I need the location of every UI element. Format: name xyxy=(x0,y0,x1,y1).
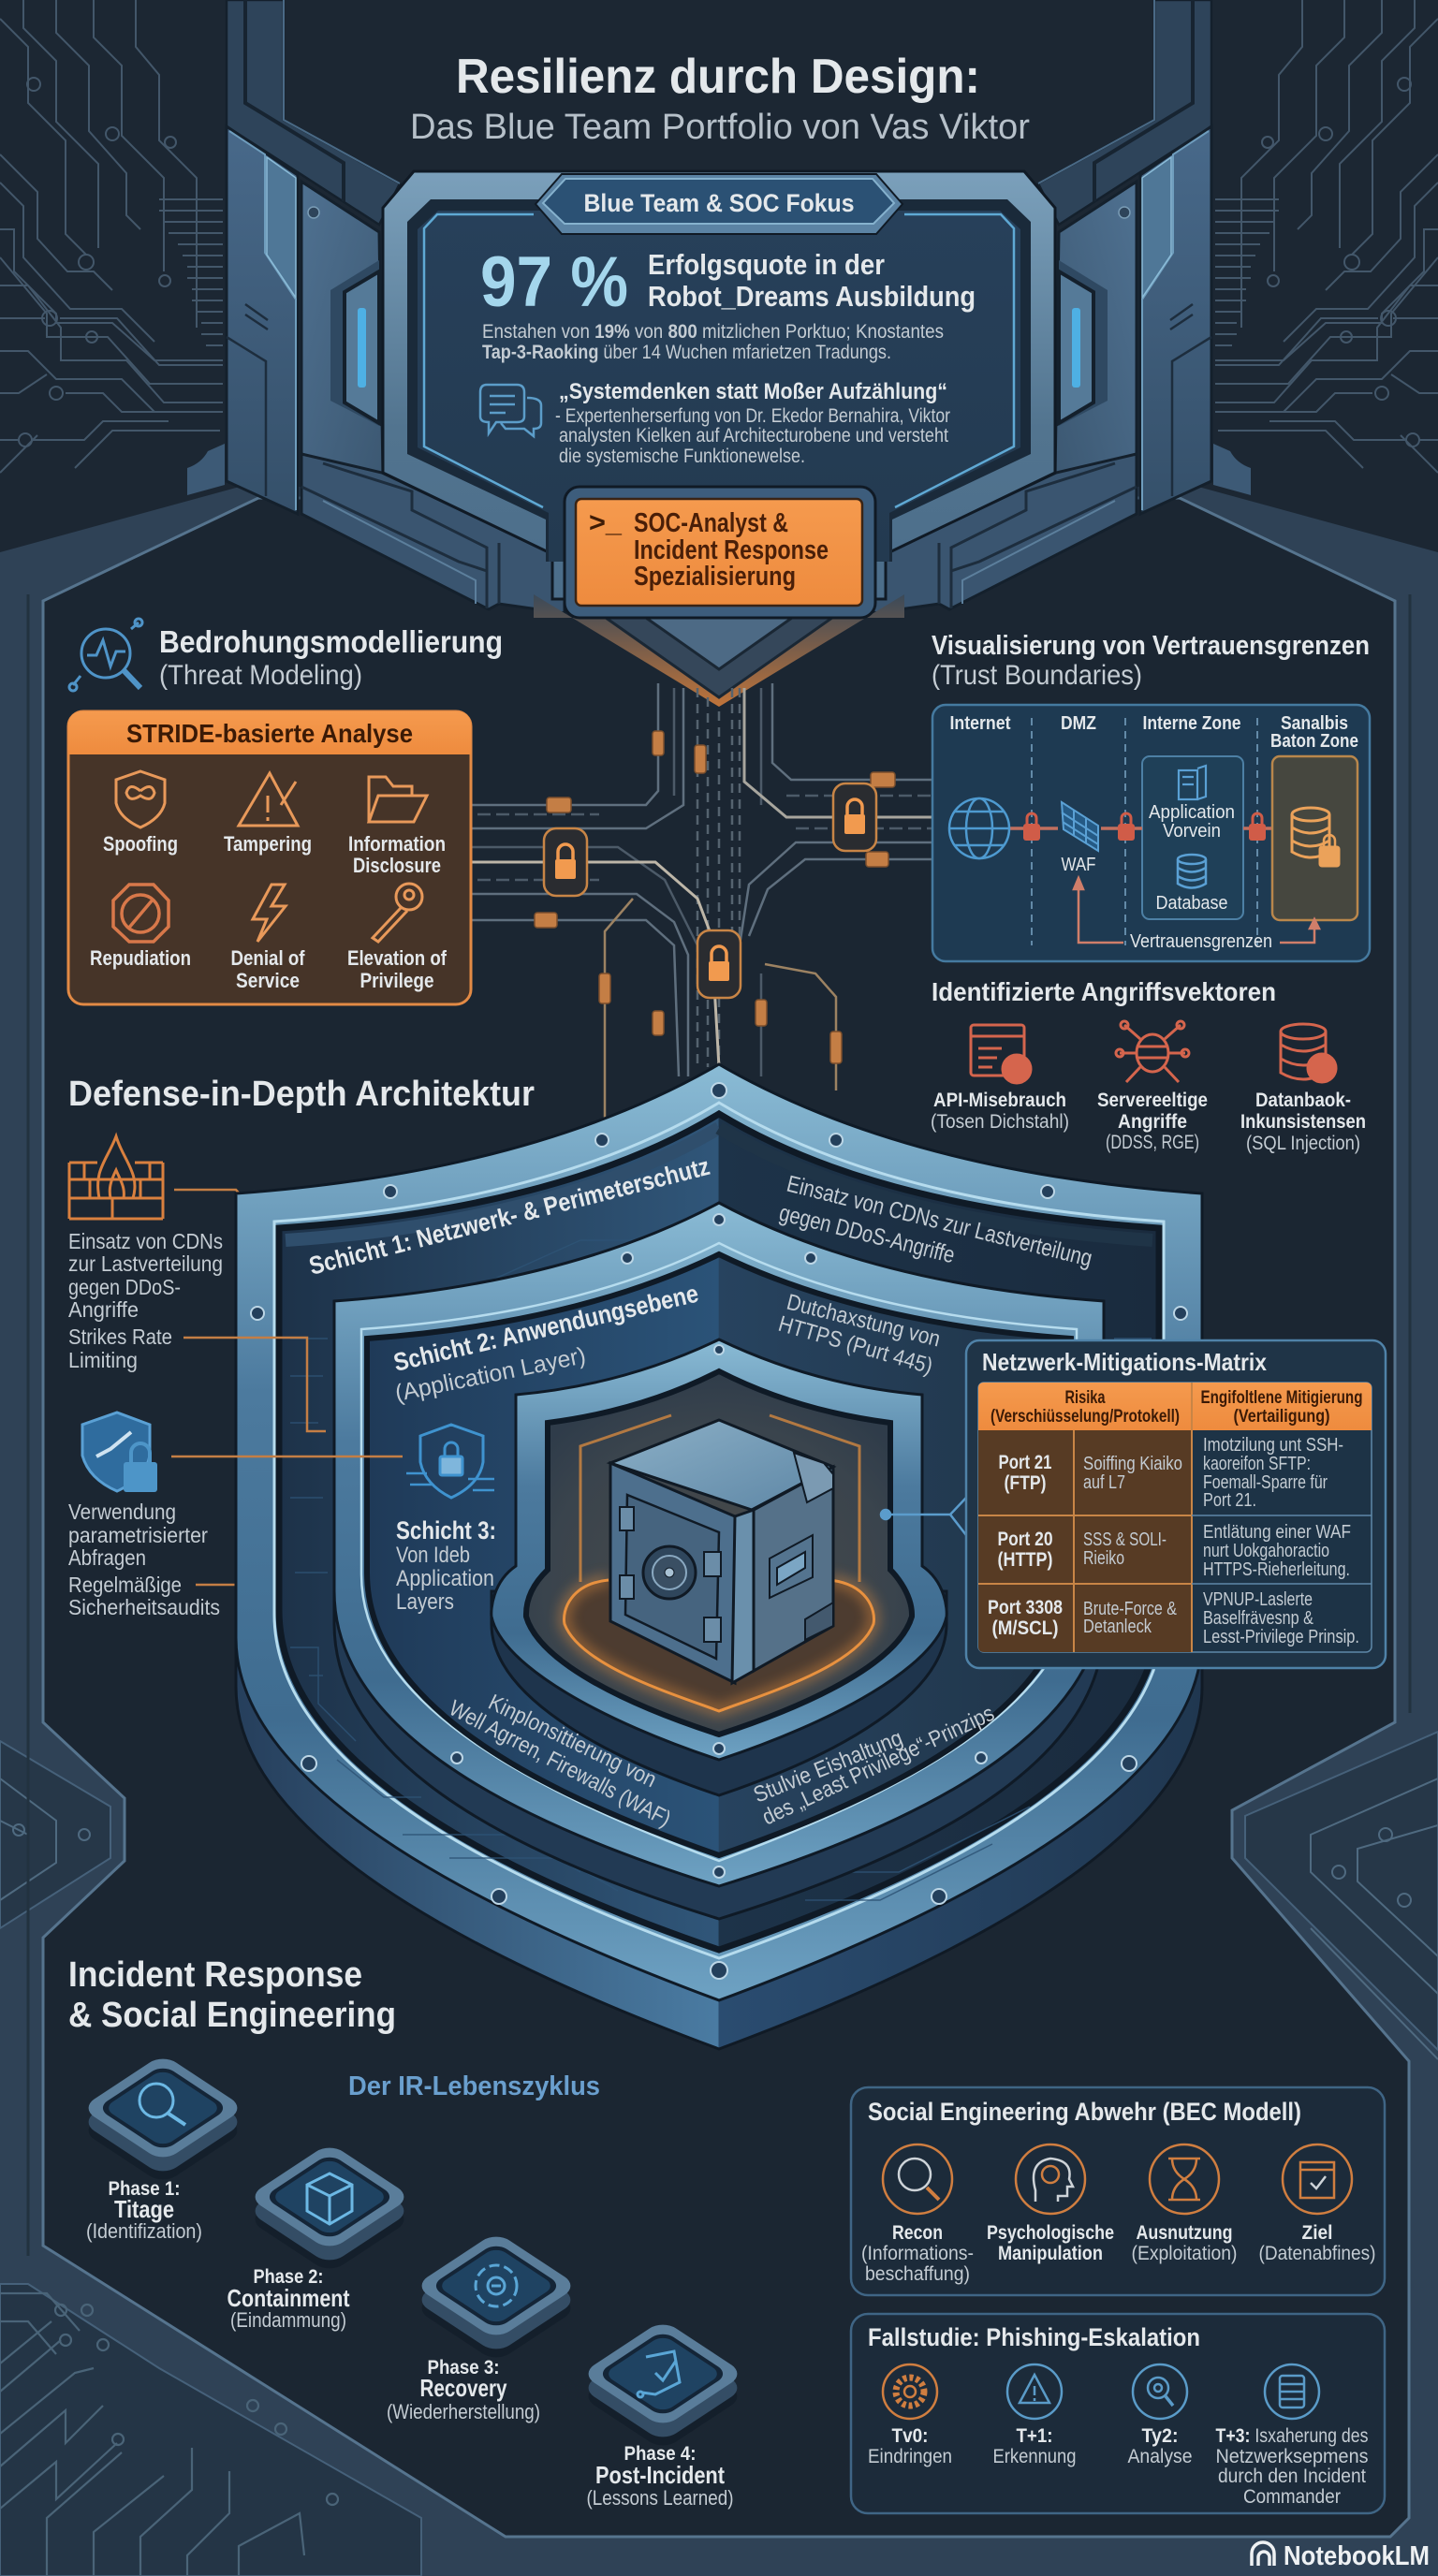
table: VPNUP-Laslerte xyxy=(1203,1589,1313,1610)
icon: gear xyxy=(476,2265,517,2306)
case study labels: Commander xyxy=(1243,2486,1341,2508)
STRIDE labels: Privilege xyxy=(360,969,434,992)
heading: incident response: Incident Response xyxy=(68,1955,362,1995)
case study labels: Erkennung xyxy=(992,2446,1077,2467)
case study title: Fallstudie: Phishing-Eskalation xyxy=(868,2323,1200,2351)
lower left description: Kinplonsittierung von xyxy=(484,1690,660,1793)
icon: psychological manipulation xyxy=(1016,2144,1085,2214)
rate limiting leader xyxy=(183,1338,326,1431)
shield leader xyxy=(171,1456,403,1457)
icon: recon xyxy=(883,2144,952,2214)
layer 1 rim highlight xyxy=(274,1103,1164,1958)
attack vector labels: Datanbaok- xyxy=(1255,1090,1351,1111)
attack vector labels: Inkunsistensen xyxy=(1240,1111,1366,1133)
lower right description: des „Least Privilege“-Prinzips xyxy=(758,1701,998,1830)
title: Resilienz durch Design: xyxy=(456,50,980,104)
icon: exploitation xyxy=(1150,2144,1219,2214)
STRIDE labels: Tampering xyxy=(224,832,312,856)
firewall text: Strikes Rate xyxy=(68,1325,172,1349)
phase 4 label xyxy=(586,2443,734,2510)
label: database: Database xyxy=(1155,893,1228,914)
icon: lock on the left trace xyxy=(544,828,587,896)
stat description: Robot_Dreams Ausbildung xyxy=(648,280,976,313)
phase 1 label xyxy=(86,2178,202,2243)
panel: STRIDE analysis xyxy=(68,711,471,1004)
icon: denial of service xyxy=(253,885,286,942)
section: threat modeling heading: Bedrohungsmodellierung xyxy=(159,624,503,659)
firewall text xyxy=(68,1229,223,1372)
expert quote xyxy=(555,379,950,467)
STRIDE labels: Spoofing xyxy=(103,832,178,856)
firewall text: zur Lastverteilung xyxy=(68,1251,223,1276)
layer 1 rim xyxy=(236,1064,1202,2000)
social engineering title: Social Engineering Abwehr (BEC Modell) xyxy=(868,2098,1301,2126)
firewall leader xyxy=(174,1190,257,1213)
phase 4 label: Post-Incident xyxy=(595,2461,725,2489)
table: SSS & SOLI- xyxy=(1083,1530,1167,1550)
phase 4 tile xyxy=(580,2320,745,2510)
layer 3 vault interior xyxy=(526,1371,912,1734)
heading: IR lifecycle: Der IR-Lebenszyklus xyxy=(348,2071,600,2101)
phase 2 label: Phase 2: xyxy=(253,2266,324,2288)
section: threat modeling heading: (Threat Modeling) xyxy=(159,660,362,691)
icon: document xyxy=(1265,2364,1319,2419)
panel: trust boundaries diagram xyxy=(932,705,1370,961)
layer 1 description: Einsatz von CDNs zur Lastverteilung xyxy=(785,1171,1094,1272)
body text xyxy=(482,321,944,363)
icon: locked database xyxy=(1292,808,1339,866)
layer 2 heading: (Application Layer) xyxy=(393,1342,588,1407)
section: threat modeling heading xyxy=(69,619,503,691)
phase 1 label: Titage xyxy=(114,2195,174,2223)
lower left description: Well Agrren, Firewalls (WAF) xyxy=(445,1695,675,1832)
phase 2 label xyxy=(227,2266,350,2332)
expert quote: die systemische Funktionewelse. xyxy=(559,446,805,467)
attack vector labels: (SQL Injection) xyxy=(1246,1133,1360,1154)
title xyxy=(410,50,1030,147)
table: Port 21. xyxy=(1203,1490,1256,1511)
table: Port 20 xyxy=(998,1529,1052,1550)
column labels: DMZ xyxy=(1061,713,1096,734)
badge: Blue Team & SOC Fokus xyxy=(536,174,902,234)
layer 1 heading: Schicht 1: Netzwerk- & Perimeterschutz xyxy=(306,1152,712,1281)
layer 3 text: Schicht 3: xyxy=(396,1516,496,1544)
table: (M/SCL) xyxy=(992,1617,1058,1639)
icon: checklist xyxy=(638,2351,680,2397)
STRIDE labels: Disclosure xyxy=(353,854,441,877)
panel: social engineering xyxy=(851,2087,1385,2295)
STRIDE labels: Information xyxy=(348,832,446,856)
social engineering labels: Psychologische xyxy=(987,2222,1114,2244)
social engineering labels xyxy=(861,2222,1376,2285)
layer 3 text: Layers xyxy=(396,1589,454,1615)
phase 3 label xyxy=(387,2357,540,2423)
rivets xyxy=(251,1083,1187,1979)
callout: SOC analyst specialization xyxy=(565,487,875,618)
layer 2 depth xyxy=(334,1339,1104,1919)
audits leader xyxy=(196,1584,279,1586)
label: application: Vorvein xyxy=(1163,821,1221,842)
icon: layer 3 shield xyxy=(406,1425,494,1498)
social engineering labels: beschaffung) xyxy=(865,2263,970,2285)
layer 2 rim xyxy=(334,1203,1104,1886)
label: WAF: WAF xyxy=(1062,855,1095,875)
icon: lock on the lower trace xyxy=(697,930,741,998)
label: application: Application xyxy=(1149,802,1235,823)
table: (Vertailigung) xyxy=(1234,1407,1329,1427)
social engineering labels: (Datenabfines) xyxy=(1258,2243,1376,2264)
social engineering labels: Ziel xyxy=(1301,2222,1333,2244)
section: trust boundaries heading: (Trust Boundaries) xyxy=(932,660,1142,691)
column labels: Internet xyxy=(949,713,1011,734)
phase 4 label: (Lessons Learned) xyxy=(586,2486,734,2510)
expert quote: „Systemdenken statt Moßer Aufzählung“ xyxy=(559,379,947,404)
heading: incident response: & Social Engineering xyxy=(68,1996,396,2035)
layer 3 rim xyxy=(492,1339,946,1760)
layer 2 description xyxy=(775,1290,943,1380)
case study labels: Eindringen xyxy=(868,2446,952,2467)
top structural plates xyxy=(227,0,1211,613)
layer 3 depth xyxy=(492,1591,946,1795)
shield text xyxy=(68,1500,220,1619)
icon: API abuse xyxy=(971,1025,1031,1083)
firewall text: Einsatz von CDNs xyxy=(68,1229,223,1253)
attack vector labels: API-Misebrauch xyxy=(933,1090,1066,1111)
layer 2 rim highlight xyxy=(361,1243,1077,1861)
chevron below the panel xyxy=(534,594,904,707)
firewall text: Limiting xyxy=(68,1348,138,1372)
internal zone box xyxy=(1142,756,1243,919)
icon: lock on the right trace xyxy=(833,783,876,851)
panel: phishing case study xyxy=(851,2314,1385,2513)
table: kaoreifon SFTP: xyxy=(1203,1454,1311,1474)
icon: box xyxy=(307,2174,352,2224)
callout: SOC analyst specialization: >_ xyxy=(589,507,622,538)
STRIDE labels: Service xyxy=(236,969,300,992)
icon: speech bubbles xyxy=(480,385,541,436)
table: Engifoltlene Mitigierung xyxy=(1200,1388,1363,1408)
table xyxy=(978,1383,1372,1652)
attack vector labels: (DDSS, RGE) xyxy=(1106,1132,1199,1153)
social engineering labels: Recon xyxy=(892,2222,943,2244)
phase 3 label: Recovery xyxy=(419,2374,507,2402)
case study labels: T+1: xyxy=(1017,2425,1052,2447)
social engineering labels: (Informations- xyxy=(861,2243,974,2264)
body text: Tap-3-Raoking über 14 Wuchen mfarietzen Tradungs. xyxy=(482,342,891,363)
case study labels xyxy=(868,2425,1369,2508)
table: HTTPS-Rieherleitung. xyxy=(1203,1559,1350,1580)
icon: magnifier with pulse xyxy=(69,619,142,691)
layer 2 heading xyxy=(391,1280,701,1407)
layer 2 floor xyxy=(367,1254,1071,1855)
attack vector labels: Angriffe xyxy=(1118,1111,1187,1133)
icon: information disclosure xyxy=(369,777,427,822)
shield text: Sicherheitsaudits xyxy=(68,1595,220,1619)
icon: magnifier xyxy=(139,2084,185,2125)
icon: alert xyxy=(1007,2364,1062,2419)
phase 3 label: (Wiederherstellung) xyxy=(387,2400,540,2423)
STRIDE labels: Repudiation xyxy=(90,946,191,970)
stat description: Erfolgsquote in der xyxy=(648,248,885,281)
lower right description: Stulvie Eishaltung xyxy=(750,1725,906,1808)
attack vector labels xyxy=(931,1090,1366,1154)
callout: SOC analyst specialization: Spezialisierung xyxy=(634,562,796,592)
heading: defense in depth: Defense-in-Depth Architektur xyxy=(68,1075,535,1114)
phase 2 label: (Eindammung) xyxy=(230,2308,346,2332)
floor circuit texture xyxy=(290,1240,1152,1900)
shield text: Regelmäßige xyxy=(68,1573,182,1597)
orange glow ring xyxy=(565,1415,873,1711)
phase 3 tile xyxy=(387,2232,579,2423)
trace pads xyxy=(535,731,895,1063)
icon: spoofing xyxy=(116,771,165,827)
icon: analysis xyxy=(1133,2364,1187,2419)
layer 1 description: gegen DDoS-Angriffe xyxy=(777,1200,958,1268)
panel: Blue Team and SOC focus xyxy=(383,171,1055,618)
table: (Verschiüsselung/Protokell) xyxy=(990,1407,1180,1427)
column labels: Sanalbis xyxy=(1281,713,1348,734)
label: Vertrauensgrenzen: Vertrauensgrenzen xyxy=(1130,931,1272,952)
icon: database inconsistency xyxy=(1281,1024,1336,1082)
icon: elevation of privilege xyxy=(373,884,422,942)
icon: intrusion xyxy=(883,2364,937,2419)
case study labels: Netzwerksepmens xyxy=(1215,2446,1369,2467)
icon: repudiation xyxy=(113,885,169,942)
central network traces xyxy=(471,683,932,1123)
table: Port 3308 xyxy=(988,1597,1063,1618)
layer 3 text: Von Ideb xyxy=(396,1543,470,1568)
heading: Identifizierte Angriffsvektoren xyxy=(932,977,1276,1006)
STRIDE labels: Elevation of xyxy=(347,946,448,970)
layer 2 description: Dutchaxstung von xyxy=(785,1290,943,1352)
icon: database xyxy=(1178,855,1206,887)
table: Port 21 xyxy=(998,1452,1052,1473)
column labels: Baton Zone xyxy=(1270,731,1358,752)
case study labels: Tv0: xyxy=(891,2425,929,2447)
social engineering labels: Ausnutzung xyxy=(1137,2222,1232,2244)
table: Foemall-Sparre für xyxy=(1203,1472,1328,1493)
icon: tampering xyxy=(239,773,298,826)
layer 2 heading: Schicht 2: Anwendungsebene xyxy=(391,1280,701,1377)
case study labels: Ty2: xyxy=(1142,2425,1178,2447)
matrix title: Netzwerk-Mitigations-Matrix xyxy=(982,1348,1267,1376)
vault safe xyxy=(610,1420,833,1683)
shield text: Abfragen xyxy=(68,1545,146,1570)
table: Entlätung einer WAF xyxy=(1203,1522,1351,1543)
connector to matrix xyxy=(881,1498,966,1535)
subtitle: Das Blue Team Portfolio von Vas Viktor xyxy=(410,108,1030,147)
shield extrusion xyxy=(236,1217,1202,2049)
label: application xyxy=(1149,802,1235,842)
layer 1 ledge xyxy=(286,1128,719,1240)
badge: Blue Team & SOC Fokus: Blue Team & SOC Fokus xyxy=(584,189,854,217)
expert quote: - Expertenherserfung von Dr. Ekedor Bernahira, Viktor xyxy=(555,405,950,427)
table: Imotzilung unt SSH- xyxy=(1203,1435,1343,1456)
social engineering labels: (Exploitation) xyxy=(1131,2243,1238,2264)
section: trust boundaries heading xyxy=(932,631,1370,691)
icon: server xyxy=(1179,766,1206,799)
STRIDE labels xyxy=(90,832,448,992)
expert quote: analysten Kielken auf Architecturobene und versteht xyxy=(559,425,948,446)
case study labels: Analyse xyxy=(1127,2446,1193,2467)
connection line with locks xyxy=(1010,813,1271,841)
phase 4 label: Phase 4: xyxy=(624,2443,697,2465)
layer 2 description: HTTPS (Purt 445) xyxy=(775,1311,935,1380)
layer 1 description xyxy=(777,1171,1094,1272)
icon: shield with lock xyxy=(82,1412,157,1492)
phase 2 tile xyxy=(227,2143,412,2332)
defense-in-depth shield xyxy=(171,1064,1202,2049)
phase 3 label: Phase 3: xyxy=(427,2357,500,2378)
table: Risika xyxy=(1065,1388,1106,1408)
section: trust boundaries heading: Visualisierung von Vertrauensgrenzen xyxy=(932,631,1370,661)
column labels: Interne Zone xyxy=(1142,713,1241,734)
callout: SOC analyst specialization: SOC-Analyst & xyxy=(634,508,788,538)
table: nurt Uokgahoractio xyxy=(1203,1541,1329,1561)
heading: incident response xyxy=(68,1955,396,2035)
attack vector labels: (Tosen Dichstahl) xyxy=(931,1111,1069,1133)
case study labels: durch den Incident xyxy=(1218,2466,1366,2487)
stat description xyxy=(648,248,976,313)
icon: globe xyxy=(949,798,1009,858)
table: Brute-Force & xyxy=(1083,1599,1178,1619)
panel: network mitigation matrix xyxy=(966,1340,1386,1668)
table: Lesst-Privilege Prinsip. xyxy=(1203,1627,1359,1647)
heading: STRIDE-basierte Analyse xyxy=(126,719,413,748)
icon: firewall xyxy=(69,1136,163,1219)
phase 2 label: Containment xyxy=(227,2284,350,2312)
icon: target xyxy=(1283,2144,1352,2214)
table: (FTP) xyxy=(1004,1472,1047,1494)
layer 1 floor xyxy=(279,1114,1159,1950)
stat: 97 %: 97 % xyxy=(480,242,628,322)
table: Soiffing Kiaiko xyxy=(1083,1454,1182,1474)
table: Detanleck xyxy=(1083,1617,1152,1637)
firewall text: Angriffe xyxy=(68,1297,139,1322)
attack vector labels: Servereeltige xyxy=(1097,1090,1208,1111)
column labels xyxy=(949,713,1358,752)
layer 3 text: Application xyxy=(396,1566,494,1591)
icon: server-side attack xyxy=(1116,1021,1189,1082)
table: Rieiko xyxy=(1083,1548,1124,1569)
case study labels: T+3: Isxaherung des xyxy=(1215,2425,1369,2447)
sandbox zone box xyxy=(1272,756,1357,920)
section: attack vectors xyxy=(931,977,1366,1154)
shield text: parametrisierter xyxy=(68,1523,208,1547)
layer 3 text xyxy=(396,1516,496,1615)
STRIDE labels: Denial of xyxy=(230,946,305,970)
phase 1 label: (Identifization) xyxy=(86,2219,202,2243)
table: auf L7 xyxy=(1083,1472,1125,1493)
boundary arrows xyxy=(1074,878,1319,943)
shield text: Verwendung xyxy=(68,1500,176,1524)
body text: Enstahen von 19% von 800 mitzlichen Porktuo; Knostantes xyxy=(482,321,944,343)
social engineering labels: Manipulation xyxy=(998,2243,1103,2264)
left defense annotations xyxy=(68,1136,279,1619)
icon: WAF wall xyxy=(1062,802,1098,851)
callout: SOC analyst specialization: Incident Response xyxy=(634,535,829,565)
table: Baselfrävesnp & xyxy=(1203,1608,1314,1629)
table: (HTTP) xyxy=(998,1549,1052,1571)
firewall text: gegen DDoS- xyxy=(68,1275,181,1299)
phase 1 tile xyxy=(81,2054,245,2243)
phase 1 label: Phase 1: xyxy=(109,2178,180,2200)
